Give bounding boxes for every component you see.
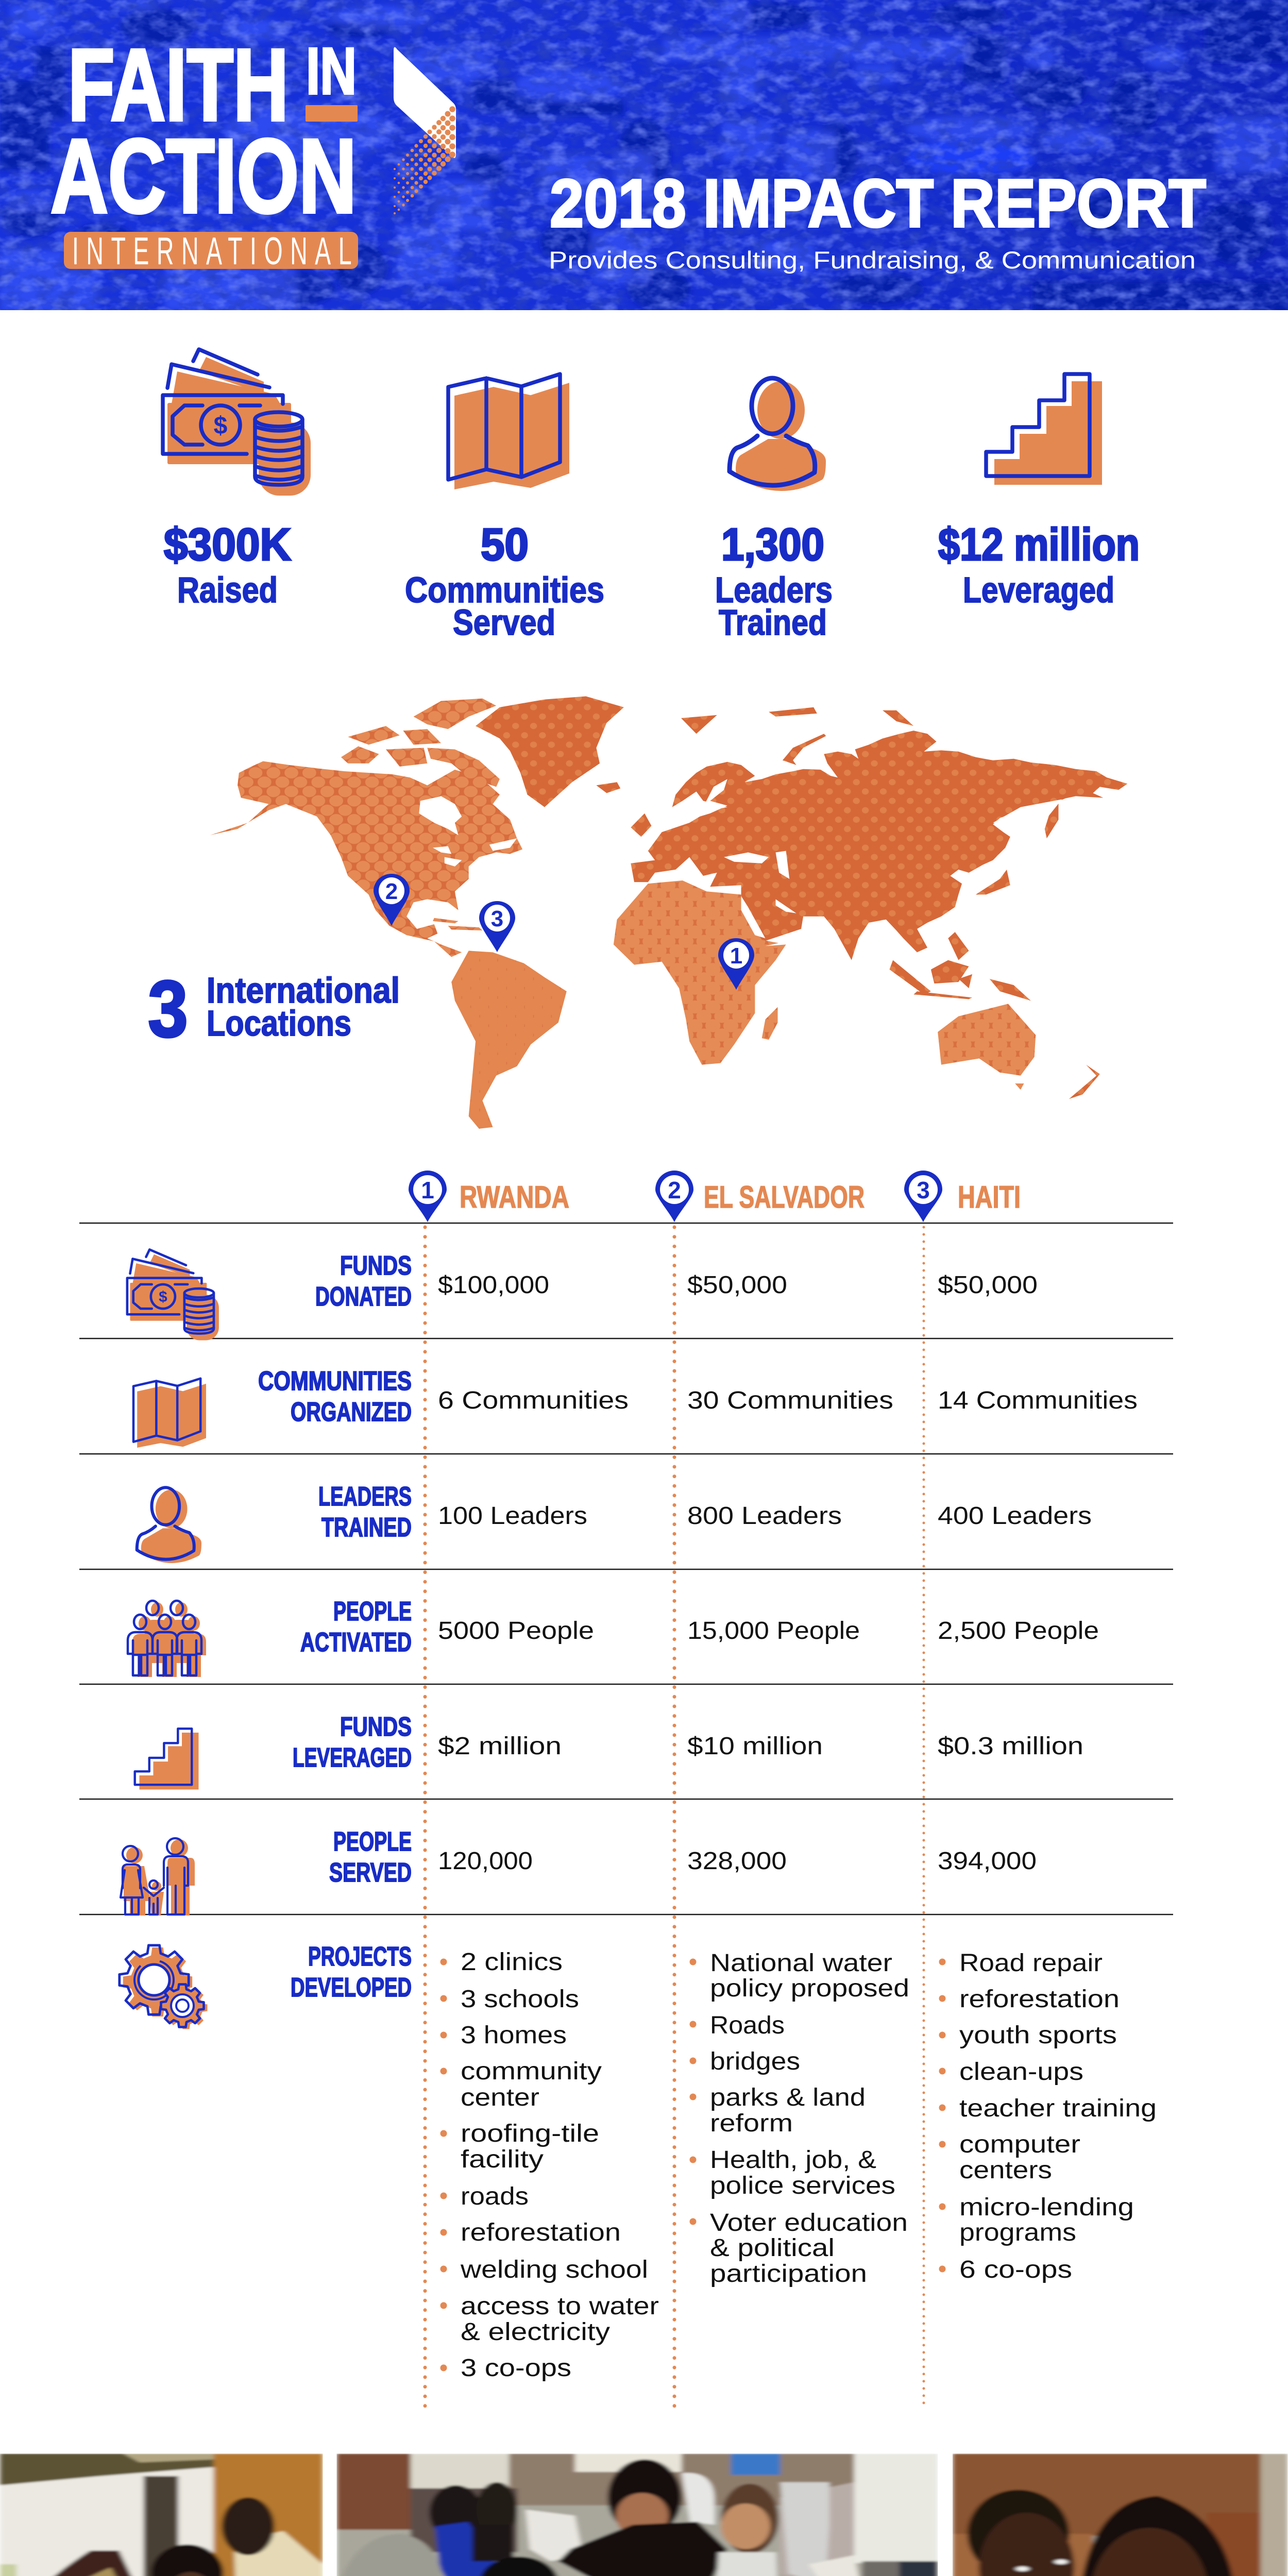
icon: folded map [448,374,569,489]
stat value: $300K: $300K [164,519,291,570]
row values: 400 Leaders [938,1502,1092,1530]
row: leaders trained [137,1482,1092,1563]
list: Rwanda projects: 3 schools [461,1986,579,2013]
row values: 394,000 [938,1848,1037,1875]
row values [438,1733,1083,1760]
icon: person bust [730,378,826,491]
list: El Salvador projects [689,1950,909,2287]
list: Rwanda projects: reforestation [461,2219,621,2246]
map pin 1 [718,938,754,990]
list: Haiti projects [939,1950,1157,2283]
row label: FUNDS [340,1712,412,1742]
list: Rwanda projects: 3 co-ops [461,2354,571,2382]
icon: family [121,1838,195,1916]
list: Haiti projects: Road repair [959,1950,1103,1977]
list: Rwanda projects: welding school [460,2256,648,2283]
table header: Haiti [904,1171,1021,1222]
row values [438,1387,1138,1414]
row label: TRAINED [321,1513,412,1543]
key statistics row [163,349,1140,642]
row label [291,1942,412,2003]
row label: LEADERS [318,1482,412,1512]
photo: woman in headwrap with two people [0,2454,323,2576]
row values: 800 Leaders [687,1502,842,1530]
row values [438,1848,1037,1875]
callout: 3 International Locations [148,964,400,1054]
stat label: Leveraged: Leveraged [963,570,1114,610]
row: people served [121,1827,1037,1916]
stat label: Leaders Trained: Leaders [715,570,833,610]
logo word IN: IN [306,35,357,108]
table header: Haiti: HAITI [958,1180,1021,1214]
photo: youth group gathered in a circle [337,2454,938,2576]
icon: bills and coins: $ [214,412,228,439]
icon: bills and coins: $ [159,1289,167,1306]
callout: 3 International Locations: International [207,970,400,1010]
map pin 1: 1 [730,943,742,969]
stat label: Leaders Trained [715,570,833,642]
row values: $50,000 [938,1272,1038,1299]
list: El Salvador projects: Roads [710,2012,785,2039]
table header: Rwanda: 1 [421,1177,434,1204]
list: Haiti projects: clean-ups [959,2058,1083,2086]
list: El Salvador projects: Health, job, & [710,2146,876,2174]
table header: Haiti: 3 [917,1177,930,1204]
list: Haiti projects: programs [959,2219,1076,2246]
row label: ORGANIZED [291,1397,412,1427]
row label [315,1251,412,1312]
table header: Rwanda: RWANDA [460,1180,569,1214]
table header: El Salvador [655,1171,865,1222]
list: Rwanda projects: community [461,2058,602,2085]
icon: gears [120,1945,207,2029]
photo strip [0,2454,1287,2576]
row values: $100,000 [438,1272,549,1299]
row label: SERVED [329,1858,412,1888]
list: El Salvador projects: National water [710,1950,892,1977]
row label: DONATED [315,1282,412,1312]
callout: 3 International Locations: 3 [148,964,188,1054]
row label: PEOPLE [333,1597,412,1626]
table header: El Salvador: EL SALVADOR [704,1180,865,1214]
list: Haiti projects: youth sports [959,2022,1117,2049]
callout: 3 International Locations: Locations [207,1003,351,1043]
list: El Salvador projects: & political [710,2234,835,2262]
row label: LEVERAGED [293,1743,412,1773]
row: funds leveraged [135,1712,1083,1790]
report subtitle: Provides Consulting, Fundraising, & Communication [549,246,1196,274]
icon: bills and coins [127,1249,219,1340]
list: Rwanda projects: facility [461,2146,544,2173]
header banner [0,0,1288,310]
comparison table [79,1171,1173,2409]
map pin 3: 3 [491,906,503,931]
row values: $50,000 [687,1272,787,1299]
row label [293,1712,412,1773]
row label: COMMUNITIES [258,1366,412,1396]
logo chevron mark with dots [394,47,456,214]
list: El Salvador projects: bridges [710,2048,800,2075]
stat: leaders trained [715,378,833,642]
list: Rwanda projects: center [461,2084,539,2111]
list: Haiti projects: 6 co-ops [959,2256,1072,2283]
row label [329,1827,412,1888]
list: Rwanda projects: 2 clinics [461,1948,563,1976]
logo word International: INTERNATIONAL [72,230,359,273]
row values: $2 million [438,1733,562,1760]
row values: 30 Communities [687,1387,893,1414]
row: people activated [128,1597,1099,1677]
stat label: Communities Served: Communities [405,570,604,610]
row values: 15,000 People [687,1617,860,1645]
table header: El Salvador: 2 [668,1177,681,1204]
stat label: Communities Served [405,570,604,642]
list: Haiti projects: computer [959,2131,1080,2158]
row label [300,1597,412,1657]
logo word FAITH: FAITH [68,28,289,142]
photo: mother holding a child [953,2454,1287,2576]
icon: person bust [137,1487,201,1563]
list: Rwanda projects: & electricity [461,2318,610,2346]
stat: communities served [405,374,604,642]
logo word ACTION: ACTION [50,117,357,235]
row values [438,1272,1038,1299]
list: El Salvador projects: parks & land [710,2084,866,2111]
row label: PROJECTS [308,1942,412,1972]
row: projects developed [120,1942,1157,2382]
list: Rwanda projects: 3 homes [461,2022,567,2049]
row values [438,1617,1099,1645]
list: El Salvador projects: reform [710,2110,793,2137]
stat value: 50: 50 [481,519,529,570]
row values [438,1502,1092,1530]
row values: 5000 People [438,1617,594,1645]
row values: $10 million [687,1733,823,1760]
row values: 100 Leaders [438,1502,587,1530]
row: communities organized [133,1366,1138,1448]
row label: FUNDS [340,1251,412,1281]
icon: staircase [986,374,1102,485]
map pin 2 [374,874,410,926]
report title: 2018 IMPACT REPORT [550,165,1206,241]
stat value: $12 million: $12 million [938,519,1140,570]
row values: 2,500 People [938,1617,1099,1645]
row label: PEOPLE [333,1827,412,1857]
row: funds donated [127,1249,1038,1340]
list: Haiti projects: teacher training [959,2095,1157,2122]
white water bodies [419,779,1062,946]
row values: $0.3 million [938,1733,1083,1760]
map pin 2: 2 [385,879,398,904]
map pin 3 [479,901,515,952]
stat label: Raised: Raised [177,570,278,610]
row label: DEVELOPED [291,1973,412,2003]
list: Rwanda projects [440,1948,659,2382]
list: El Salvador projects: Voter education [710,2209,908,2236]
icon: staircase [135,1728,198,1790]
row values: 6 Communities [438,1387,629,1414]
icon: folded map [133,1379,206,1448]
logo orange bar [306,105,358,122]
world map [148,697,1127,1129]
list: El Salvador projects: policy proposed [710,1975,909,2002]
list: Haiti projects: micro-lending [959,2194,1134,2221]
stat: funds leveraged [938,374,1140,610]
map land masses [210,697,1127,1129]
icon: bills and coins [163,349,311,496]
table header: Rwanda [409,1171,569,1222]
logo International pill [64,232,358,269]
stat label: Leaders Trained: Trained [719,602,827,642]
list: Rwanda projects: roofing-tile [461,2120,599,2147]
list: Rwanda projects: access to water [461,2293,659,2320]
list: Haiti projects: reforestation [959,1986,1120,2013]
list: El Salvador projects: participation [710,2260,867,2287]
stat: money raised [163,349,311,610]
row label: ACTIVATED [300,1628,412,1657]
logo: Faith in Action International [50,28,456,273]
row values: 120,000 [438,1848,533,1875]
row values: 328,000 [687,1848,787,1875]
icon: group of people [128,1601,206,1677]
list: Haiti projects: centers [959,2157,1052,2184]
stat label: Communities Served: Served [453,602,555,642]
list: Rwanda projects: roads [461,2183,529,2210]
list: El Salvador projects: police services [710,2172,895,2199]
row label [258,1366,412,1427]
row values: 14 Communities [938,1387,1138,1414]
stat value: 1,300: 1,300 [721,519,824,570]
crowd photo background in blue [0,0,1288,310]
row label [318,1482,412,1543]
